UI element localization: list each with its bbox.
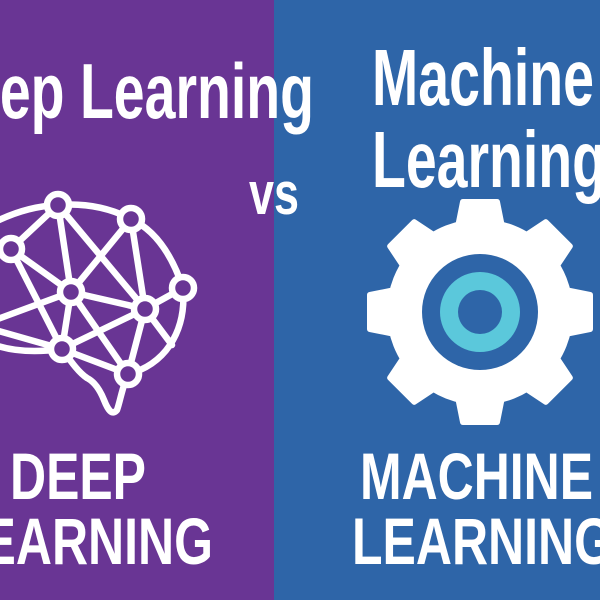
panel: deep learning background	[0, 0, 274, 600]
panel: machine learning background	[274, 0, 600, 600]
vs label: vs	[249, 160, 299, 227]
icon: gear	[370, 202, 590, 422]
title: machine learning	[372, 33, 600, 204]
label: deep learning	[0, 439, 213, 578]
label: deep learning: DEEP	[10, 439, 146, 513]
icon: brain network	[0, 194, 194, 412]
label: machine learning	[352, 439, 600, 578]
